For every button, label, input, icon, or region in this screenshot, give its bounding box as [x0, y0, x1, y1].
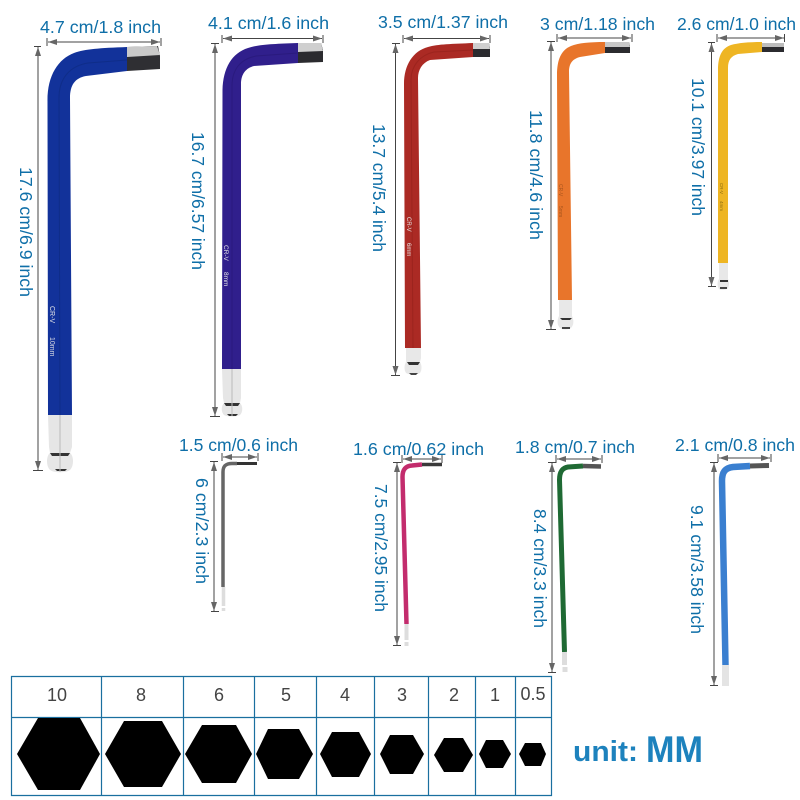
width dimension 8mm — [222, 35, 323, 43]
key 10mm size marking: 10mm — [48, 337, 55, 357]
green hex key — [560, 466, 601, 672]
key 6mm marking: CR-V — [405, 217, 411, 232]
green key ball end — [562, 652, 568, 672]
key 5mm: orange hex key — [557, 42, 630, 330]
gray key tip — [237, 462, 257, 465]
unit label: MM — [646, 729, 703, 770]
table header sizes: 8 — [136, 685, 146, 705]
length dimension pink key — [393, 462, 401, 646]
width dimension green key — [556, 455, 602, 463]
key 4mm size marking: 4mm — [719, 201, 724, 211]
width label 5mm: 3 cm/1.18 inch — [540, 14, 655, 34]
table header sizes: 6 — [214, 685, 224, 705]
length dimension 8mm — [210, 44, 220, 416]
key 10mm ball end — [47, 415, 73, 472]
key 5mm size marking: 5mm — [557, 206, 563, 217]
key 10mm short-arm tip — [127, 46, 160, 71]
table header sizes: 4 — [340, 685, 350, 705]
light blue hex key — [722, 466, 769, 686]
green key tip — [583, 464, 601, 469]
gray hex key — [223, 464, 257, 611]
size table — [12, 676, 552, 796]
unit label — [573, 729, 703, 770]
width label pink key: 1.6 cm/0.62 inch — [353, 439, 484, 459]
width dimension gray key — [222, 453, 258, 461]
key 8mm body — [222, 43, 298, 369]
table header sizes: 0.5 — [520, 684, 546, 704]
width label light blue key: 2.1 cm/0.8 inch — [675, 435, 795, 455]
width label gray key: 1.5 cm/0.6 inch — [179, 435, 298, 455]
width label green key: 1.8 cm/0.7 inch — [515, 437, 635, 457]
length label green key: 8.4 cm/3.3 inch — [530, 509, 550, 628]
key 10mm: dark blue hex key — [47, 46, 160, 472]
key 5mm marking: CR-V — [557, 184, 563, 197]
key 6mm short-arm tip — [473, 43, 490, 57]
table header sizes — [47, 684, 546, 705]
width dimension 4mm — [717, 34, 784, 42]
gray key ball end — [222, 587, 225, 611]
length label 8mm: 16.7 cm/6.57 inch — [188, 132, 208, 270]
key 6mm size marking: 6mm — [405, 243, 411, 256]
length dimension 4mm — [708, 42, 716, 286]
key 8mm short-arm tip — [298, 43, 323, 63]
key 10mm marking: CR-V — [48, 306, 55, 323]
key 5mm ball end — [558, 300, 573, 330]
length dimension green key — [548, 462, 556, 672]
length dimension 5mm — [546, 42, 556, 330]
length label gray key: 6 cm/2.3 inch — [192, 478, 212, 584]
width label 10mm: 4.7 cm/1.8 inch — [40, 17, 161, 37]
key 10mm body — [47, 47, 127, 415]
table header sizes: 3 — [397, 685, 407, 705]
key 8mm marking: CR-V — [222, 245, 229, 262]
key 5mm short-arm tip — [605, 42, 630, 53]
table header sizes: 10 — [47, 685, 67, 705]
table header sizes: 5 — [281, 685, 291, 705]
hexagon profiles — [17, 718, 546, 790]
gray key body — [223, 464, 237, 587]
key 8mm size marking: 8mm — [222, 272, 229, 286]
key 4mm ball end — [718, 263, 729, 290]
light blue key tip — [750, 463, 769, 468]
width dimension light blue key — [718, 454, 771, 462]
width dimension 5mm — [557, 34, 632, 42]
key 5mm body — [557, 42, 605, 300]
length label 6mm: 13.7 cm/5.4 inch — [369, 124, 389, 252]
width dimension 10mm — [47, 38, 161, 46]
key 4mm: yellow hex key — [718, 42, 784, 290]
key 6mm body — [404, 43, 473, 348]
light blue key ball end — [722, 665, 729, 686]
table grid — [12, 676, 552, 796]
length dimension 6mm — [391, 44, 400, 376]
key 4mm marking: CR-V — [719, 183, 724, 194]
key 8mm ball end — [222, 369, 242, 416]
length dimension gray key — [210, 462, 219, 612]
table header sizes: 1 — [490, 685, 500, 705]
length label 4mm: 10.1 cm/3.97 inch — [688, 78, 708, 216]
key 8mm: purple hex key — [222, 43, 323, 416]
pink key body — [402, 464, 422, 624]
length label 10mm: 17.6 cm/6.9 inch — [16, 167, 36, 297]
length label light blue key: 9.1 cm/3.58 inch — [687, 505, 707, 634]
table header sizes: 2 — [449, 685, 459, 705]
width label 8mm: 4.1 cm/1.6 inch — [208, 13, 329, 33]
key 4mm body — [718, 42, 762, 263]
length label 5mm: 11.8 cm/4.6 inch — [526, 110, 546, 240]
key 4mm short-arm tip — [762, 43, 784, 52]
width dimension 6mm — [403, 35, 490, 43]
width label 6mm: 3.5 cm/1.37 inch — [378, 12, 508, 32]
pink key ball end — [404, 624, 408, 646]
pink key tip — [422, 463, 442, 466]
key 6mm: red hex key — [404, 43, 490, 375]
unit label: unit: — [573, 736, 638, 768]
green key body — [560, 466, 583, 652]
pink hex key — [402, 464, 442, 646]
length dimension 10mm — [33, 46, 43, 470]
width dimension pink key — [402, 455, 442, 463]
key 6mm ball end — [404, 348, 422, 375]
length dimension light blue key — [710, 462, 718, 686]
length label pink key: 7.5 cm/2.95 inch — [371, 484, 391, 612]
light blue key body — [722, 466, 750, 665]
width label 4mm: 2.6 cm/1.0 inch — [677, 14, 796, 34]
